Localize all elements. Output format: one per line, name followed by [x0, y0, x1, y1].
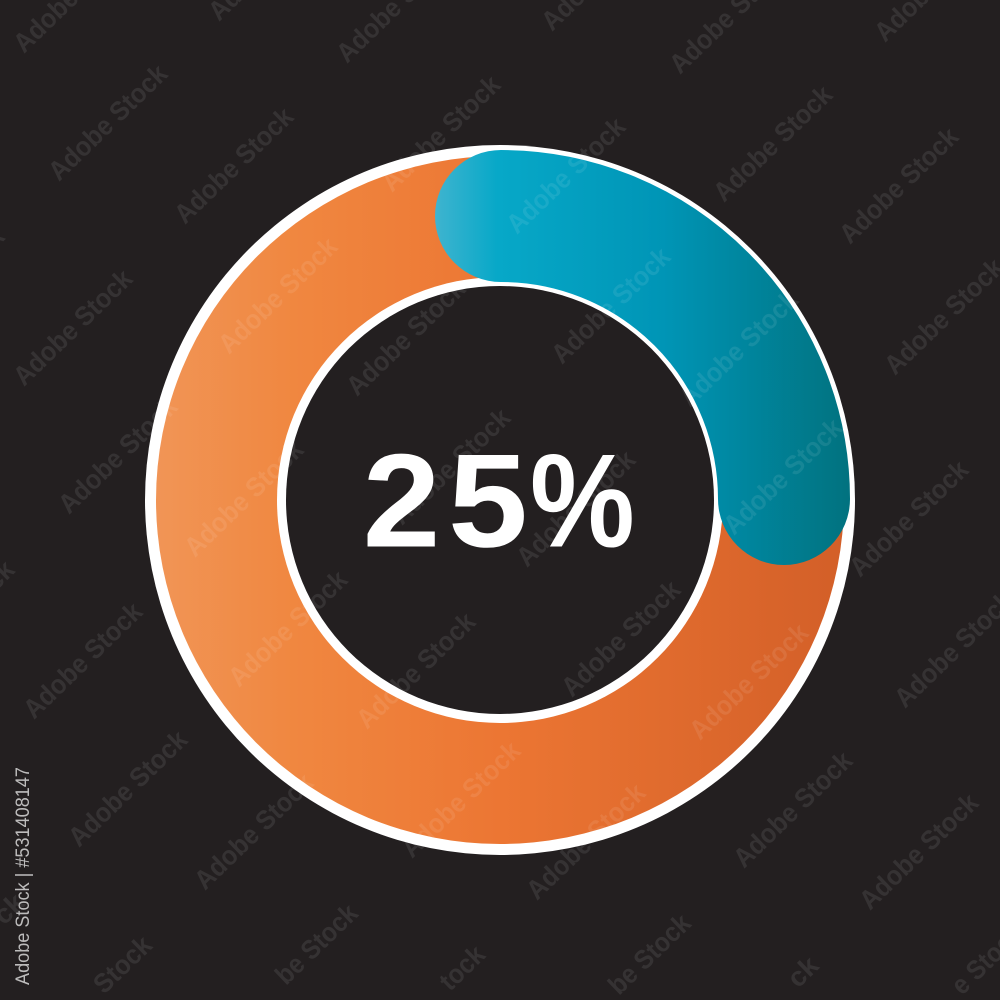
watermark pattern: Adobe Stock [853, 787, 985, 915]
watermark pattern: Adobe Stock [520, 777, 652, 905]
watermark pattern: Adobe Stock [168, 101, 300, 229]
watermark pattern: Adobe Stock [375, 69, 507, 197]
watermark pattern: Adobe Stock [178, 434, 310, 562]
watermark pattern: Adobe Stock [212, 231, 344, 359]
watermark pattern: Adobe Stock [222, 564, 354, 692]
25% segment [501, 216, 784, 499]
stock image id: Adobe Stock | #531408147 [13, 767, 34, 985]
percentage label [363, 426, 635, 575]
watermark pattern: be Stock [269, 897, 364, 990]
watermark pattern: Adobe Stock [52, 391, 184, 519]
watermark pattern: Adobe Stock [727, 745, 859, 873]
donut chart ring [145, 145, 855, 855]
watermark pattern: Adobe Stock [500, 111, 632, 239]
percentage label: 5 [448, 427, 528, 575]
watermark pattern: Adobe Stock [833, 121, 965, 249]
watermark pattern: Adobe Stock [717, 412, 849, 540]
watermark pattern: Adobe Stock [510, 444, 642, 572]
watermark pattern: Adobe Stock [385, 402, 517, 530]
watermark pattern: Adobe Stock [673, 284, 805, 412]
percentage label: % [530, 426, 635, 575]
watermark pattern: Adobe Stock [555, 574, 687, 702]
watermark pattern: Adobe Stock [188, 767, 320, 895]
watermark pattern: Adobe Stock [62, 724, 194, 852]
watermark pattern: Adobe Stock [42, 58, 174, 186]
watermark pattern: Adobe Stock [395, 735, 527, 863]
watermark pattern: Adobe Stock [707, 79, 839, 207]
watermark pattern: be Stock [602, 907, 697, 1000]
watermark pattern: Adobe Stock [843, 454, 975, 582]
watermark pattern: Adobe Stock [545, 241, 677, 369]
watermark pattern: Stock [87, 929, 158, 999]
watermark pattern: Adobe Stock [340, 273, 472, 401]
watermark pattern: Adobe Stock [7, 263, 139, 391]
watermark pattern: ck [781, 950, 825, 993]
watermark pattern: Adobe Stock [350, 606, 482, 734]
watermark pattern: Adobe Stock [683, 617, 815, 745]
watermark pattern: Adobe Stock [17, 596, 149, 724]
percentage label: 2 [363, 427, 440, 575]
watermark pattern: tock [433, 939, 491, 996]
